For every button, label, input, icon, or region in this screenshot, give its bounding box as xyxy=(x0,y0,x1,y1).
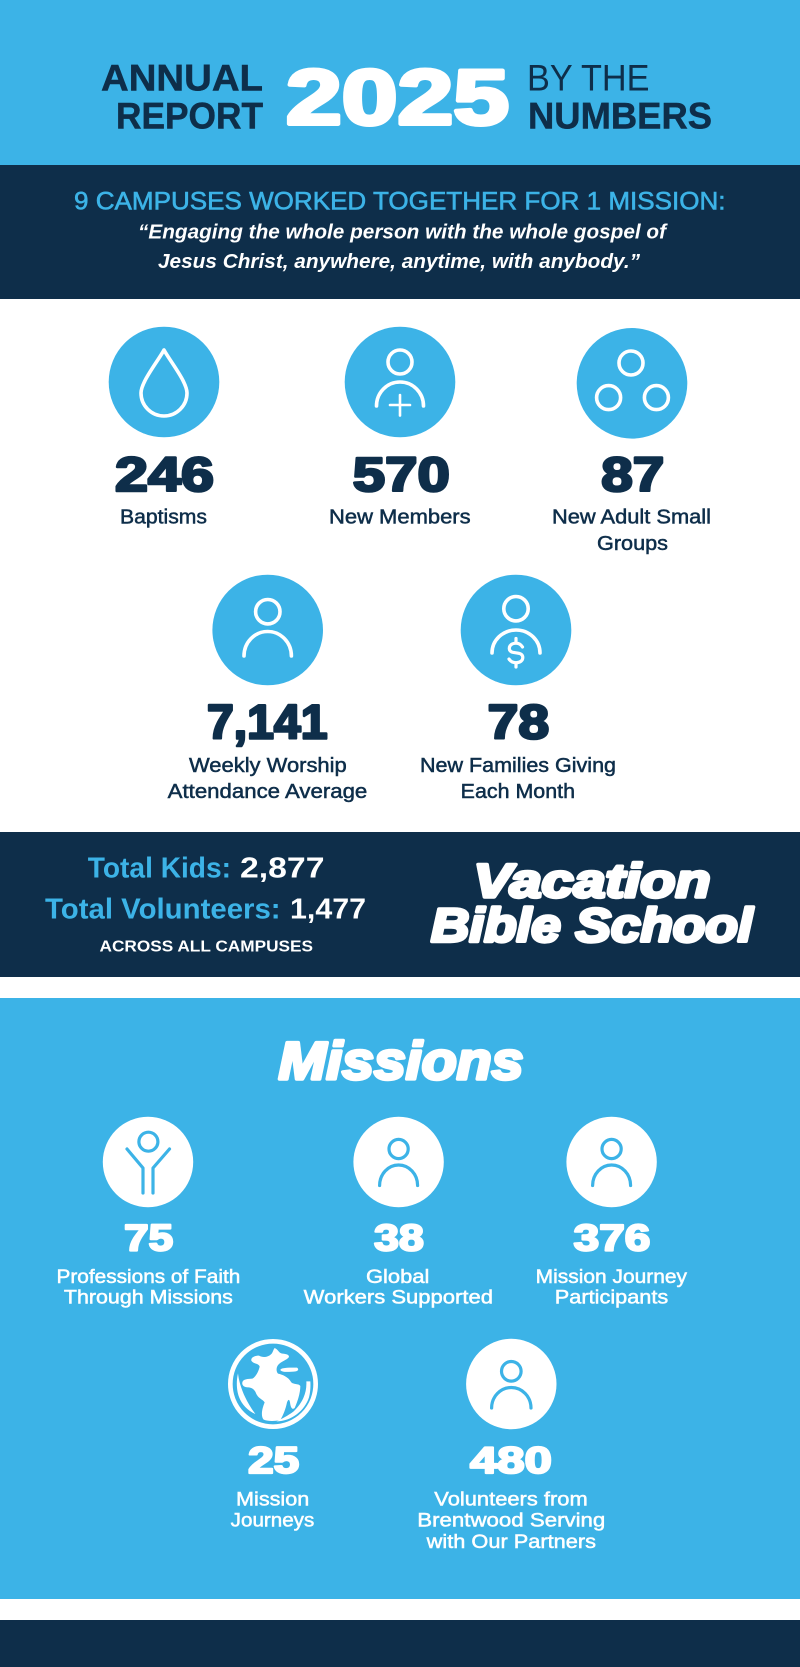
number: 7,141: 7,141 xyxy=(207,696,328,750)
label: professions of faith through missions: Through Missions xyxy=(64,1286,233,1308)
number: 570: 570 xyxy=(353,449,450,502)
number: 75: 75 xyxy=(124,1218,173,1258)
number: 246: 246 xyxy=(115,449,214,502)
stat: global workers supported xyxy=(304,1117,493,1308)
mission statement quote: “Engaging the whole person with the whole gospel of xyxy=(138,220,668,244)
stat: new adult small groups xyxy=(552,328,711,555)
vbs caption: ACROSS ALL CAMPUSES xyxy=(100,939,313,956)
title: by the numbers xyxy=(527,58,712,136)
stat: new families giving xyxy=(420,575,616,803)
stat: baptisms xyxy=(109,327,219,528)
number: 480: 480 xyxy=(470,1440,552,1481)
icon: person with plus xyxy=(345,327,455,437)
label: new adult small groups xyxy=(552,506,711,555)
title: annual report: ANNUAL xyxy=(101,58,263,99)
missions heading: Missions xyxy=(278,1032,524,1091)
mission heading: 9 CAMPUSES WORKED TOGETHER FOR 1 MISSION: xyxy=(74,187,726,215)
label: mission journey participants: Mission Journey xyxy=(536,1266,687,1288)
number: 25: 25 xyxy=(248,1440,299,1481)
footer band xyxy=(0,1620,800,1667)
number: 87: 87 xyxy=(601,449,664,502)
vbs title xyxy=(431,854,754,952)
label: new families giving each month xyxy=(420,755,616,803)
stat: mission journeys xyxy=(230,1341,316,1532)
vbs totals: 2,877 xyxy=(240,852,324,884)
vbs title: Vacation xyxy=(474,854,710,907)
title: year 2025: 2025 xyxy=(286,53,509,141)
vbs totals: Total Kids: xyxy=(88,852,231,884)
label: professions of faith through missions: Professions of Faith xyxy=(56,1266,240,1288)
stat: volunteers serving with partners xyxy=(417,1339,605,1553)
mission statement quote xyxy=(138,220,668,273)
label: mission journeys xyxy=(231,1488,315,1532)
icon: person with raised arms xyxy=(103,1117,193,1207)
mission band xyxy=(0,165,800,299)
icon: person xyxy=(466,1339,556,1429)
stat: weekly worship attendance xyxy=(168,575,367,803)
label: mission journeys: Journeys xyxy=(231,1510,315,1532)
label: global workers supported: Workers Supported xyxy=(304,1286,493,1308)
stat: new members xyxy=(329,327,471,528)
label: baptisms: Baptisms xyxy=(120,506,207,528)
number: 38: 38 xyxy=(374,1218,424,1258)
icon: globe xyxy=(230,1341,316,1427)
label: volunteers from brentwood serving with our partners xyxy=(417,1488,605,1553)
number: 78: 78 xyxy=(488,696,549,750)
label: new members: New Members xyxy=(329,506,471,528)
panel: vacation bible school xyxy=(0,832,800,977)
stat: mission journey participants xyxy=(536,1117,687,1308)
icon: person with dollar sign xyxy=(461,575,571,685)
vbs totals: Total Volunteers: xyxy=(45,894,281,926)
label: weekly worship attendance average xyxy=(168,755,367,803)
icon: person xyxy=(212,575,323,685)
vbs totals: 1,477 xyxy=(290,894,366,926)
icon: person xyxy=(566,1117,657,1207)
label: mission journey participants: Participants xyxy=(555,1286,669,1308)
vbs title: Bible School xyxy=(431,898,754,952)
label: new adult small groups: Groups xyxy=(597,533,668,555)
label: mission journeys: Mission xyxy=(236,1488,309,1510)
header band xyxy=(0,0,800,165)
label: volunteers from brentwood serving with our partners: with Our Partners xyxy=(426,1531,596,1553)
label: new adult small groups: New Adult Small xyxy=(552,506,711,528)
title: annual report: REPORT xyxy=(116,95,263,136)
title: by the numbers: NUMBERS xyxy=(528,95,712,136)
stat: professions of faith xyxy=(56,1117,240,1308)
label: new families giving each month: New Families Giving xyxy=(420,755,616,777)
label: global workers supported: Global xyxy=(366,1266,429,1288)
number: 376: 376 xyxy=(574,1218,650,1258)
label: new families giving each month: Each Month xyxy=(461,781,575,803)
icon: water drop xyxy=(109,327,219,437)
panel: missions xyxy=(0,998,800,1599)
label: professions of faith through missions xyxy=(56,1266,240,1308)
label: volunteers from brentwood serving with our partners: Brentwood Serving xyxy=(417,1510,605,1532)
vbs totals xyxy=(45,852,366,926)
label: weekly worship attendance average: Attendance Average xyxy=(168,781,367,803)
title: by the numbers: BY THE xyxy=(527,58,650,99)
icon: person xyxy=(353,1117,444,1207)
label: global workers supported xyxy=(304,1266,493,1308)
label: mission journey participants xyxy=(536,1266,687,1308)
label: weekly worship attendance average: Weekly Worship xyxy=(189,755,347,777)
mission statement quote: Jesus Christ, anywhere, anytime, with anybody.” xyxy=(158,250,641,273)
label: volunteers from brentwood serving with our partners: Volunteers from xyxy=(434,1488,588,1510)
title: annual report xyxy=(101,58,263,136)
icon: three circles xyxy=(577,328,687,439)
